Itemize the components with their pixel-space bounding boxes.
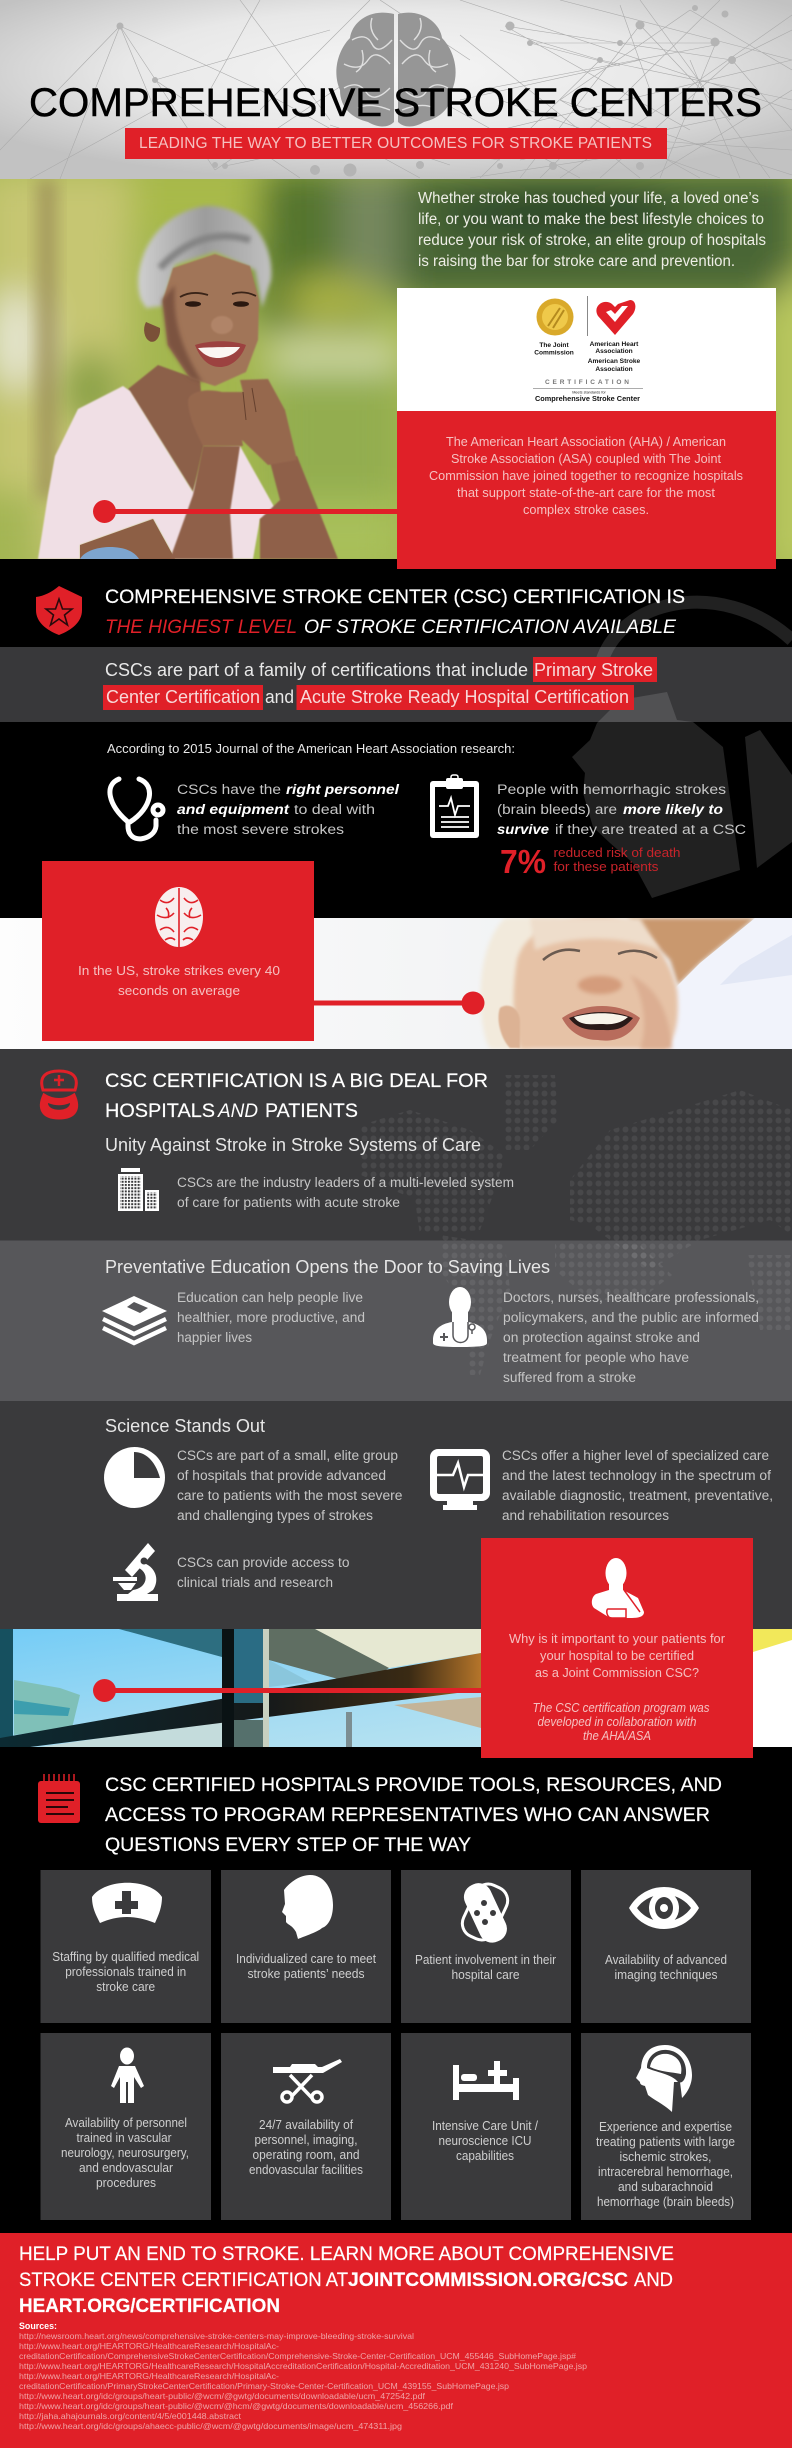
card: vascular personnel: and endovascular <box>79 2161 173 2175</box>
red callout: why it matters <box>481 1538 753 1758</box>
card: experience and expertise: Experience and expertise <box>599 2120 732 2134</box>
icon: hospital building <box>118 1168 159 1211</box>
card: patient involvement: hospital care <box>452 1968 520 1982</box>
certification logo card: Commission <box>534 350 574 356</box>
block: preventative education: on protection against stroke and <box>503 1330 700 1345</box>
network pattern <box>0 0 792 179</box>
sources list: http://www.heart.org/idc/groups/heart-public/@wcm/@gwtg/documents/downloadable/ucm_472542.pdf <box>19 2391 426 2401</box>
stat: right personnel: the most severe strokes <box>177 822 344 837</box>
photo band: laughing woman <box>0 918 792 1049</box>
heading: tools and resources <box>38 1774 722 1856</box>
pointer line <box>93 1679 481 1702</box>
certification logo card: The Joint <box>539 342 569 349</box>
card: vascular personnel <box>40 2033 211 2220</box>
stat: right personnel: to deal with <box>294 802 375 817</box>
subtitle banner: LEADING THE WAY TO BETTER OUTCOMES FOR STROKE PATIENTS <box>139 135 652 152</box>
icon: brain <box>155 887 203 947</box>
heading: highest level: THE HIGHEST LEVEL <box>105 616 297 638</box>
icon: person <box>111 2048 144 2103</box>
block: science stands out: CSCs can provide access to <box>177 1555 350 1570</box>
red stat box: every 40 seconds <box>42 861 314 1041</box>
research intro: According to 2015 Journal of the American Heart Association research: <box>107 741 515 756</box>
block: preventative education: suffered from a stroke <box>503 1370 636 1385</box>
block: preventative education: healthier, more productive, and <box>177 1310 365 1325</box>
sources list: http://www.heart.org/idc/groups/ahaecc-public/@wcm/@gwtg/documents/image/ucm_474311.jpg <box>19 2421 402 2431</box>
block: preventative education: policymakers, and the public are informed <box>503 1310 759 1325</box>
card: individualized care: Individualized care to meet <box>236 1952 376 1966</box>
heading: tools and resources: CSC CERTIFIED HOSPITALS PROVIDE TOOLS, RESOURCES, AND <box>105 1774 722 1796</box>
red partnership panel: Commission have joined together to recognize hospitals <box>429 468 743 483</box>
sources list: http://newsroom.heart.org/news/comprehensive-stroke-centers-may-improve-bleeding-stroke-survival <box>19 2331 414 2341</box>
icon: microscope <box>113 1543 158 1601</box>
stat: right personnel: CSCs have the <box>177 782 281 797</box>
red callout: why it matters: The CSC certification program was <box>532 1700 710 1715</box>
footer call to action: JOINTCOMMISSION.ORG/CSC <box>348 2269 628 2291</box>
stat: right personnel: and equipment <box>177 802 290 817</box>
certification logo card <box>397 288 776 411</box>
card: 24/7 availability: endovascular facilities <box>249 2163 363 2177</box>
black section background <box>0 559 792 919</box>
footer call to action: HEART.ORG/CERTIFICATION <box>19 2295 280 2317</box>
icon: notepad <box>38 1774 80 1823</box>
stat: more likely to survive: if they are treated at a CSC <box>555 822 746 837</box>
card: experience and expertise: hemorrhage (brain bleeds) <box>597 2195 734 2209</box>
card: intensive care unit: Intensive Care Unit / <box>432 2119 538 2133</box>
woman figure <box>38 206 338 559</box>
icon: brain <box>336 13 456 127</box>
gray band behind family of certifications <box>0 647 792 722</box>
hero photo: smiling woman outdoors <box>0 170 792 570</box>
card: patient involvement <box>401 1870 571 2023</box>
sources list: Sources: <box>19 2321 57 2331</box>
family of certifications text: Center Certification <box>106 687 260 707</box>
block: preventative education <box>102 1257 759 1385</box>
icon: joint commission gold seal <box>536 298 574 336</box>
red callout: why it matters: developed in collaboration with <box>538 1714 696 1729</box>
stat: more likely to survive: for these patients <box>554 860 658 874</box>
card: staffing: stroke care <box>96 1980 155 1994</box>
icon: nurse <box>41 1071 77 1118</box>
header panel <box>0 0 792 179</box>
card: individualized care: stroke patients’ needs <box>248 1967 364 1981</box>
stat: more likely to survive: more likely to <box>623 802 723 817</box>
heading: highest level: COMPREHENSIVE STROKE CENTER (CSC) CERTIFICATION IS <box>105 586 685 608</box>
heading: highest level <box>36 586 685 638</box>
footer call to action: STROKE CENTER CERTIFICATION AT <box>19 2269 348 2291</box>
heading: tools and resources: ACCESS TO PROGRAM REPRESENTATIVES WHO CAN ANSWER <box>105 1804 710 1826</box>
icon: stack of books <box>102 1296 167 1343</box>
heading: big deal: AND <box>217 1100 258 1122</box>
family of certifications text: and <box>265 687 294 707</box>
title: COMPREHENSIVE STROKE CENTERS <box>29 81 762 125</box>
icon: hospital bed <box>453 2061 519 2100</box>
card: vascular personnel: trained in vascular <box>76 2131 172 2145</box>
sources list: http://www.heart.org/HEARTORG/HealthcareResearch/HospitalAc- <box>19 2341 279 2351</box>
family of certifications text: Acute Stroke Ready Hospital Certification <box>300 687 629 707</box>
card: staffing: Staffing by qualified medical <box>52 1950 199 1964</box>
card: advanced imaging: Availability of advanced <box>605 1953 727 1967</box>
icon: eye <box>629 1887 699 1929</box>
sources list: http://www.heart.org/HEARTORG/HealthcareResearch/HospitalAccreditationCertification/Hospital-Accreditation_UCM_431240_SubHomePage.jsp <box>19 2361 587 2371</box>
icon: head with brain <box>636 2045 692 2112</box>
block: science stands out: CSCs offer a higher level of specialized care <box>502 1448 769 1463</box>
card: intensive care unit <box>401 2033 571 2220</box>
certification logo card: Meets standards for <box>572 390 607 394</box>
sources list: http://www.heart.org/idc/groups/heart-public/@wcm/@hcm/@gwtg/documents/downloadable/ucm_456266.pdf <box>19 2401 454 2411</box>
red callout: why it matters: as a Joint Commission CSC? <box>535 1665 699 1680</box>
block: preventative education: Education can help people live <box>177 1290 363 1305</box>
family of certifications text: CSCs are part of a family of certifications that include <box>105 660 528 680</box>
heading: big deal: PATIENTS <box>265 1100 358 1122</box>
icon: monitor <box>430 1449 490 1510</box>
red partnership panel: Stroke Association (ASA) coupled with The Joint <box>451 451 721 466</box>
stat: more likely to survive: survive <box>497 822 550 837</box>
red callout: why it matters: your hospital to be certified <box>540 1648 694 1663</box>
intro paragraph: is raising the bar for stroke care and prevention. <box>418 253 735 270</box>
card: individualized care <box>221 1870 391 2023</box>
photo band: hospital windows <box>0 1629 792 1748</box>
card: 24/7 availability <box>221 2033 391 2220</box>
sources list <box>19 2321 587 2431</box>
block: science stands out: of hospitals that provide advanced <box>177 1468 386 1483</box>
icon: stethoscope <box>110 779 163 839</box>
card: 24/7 availability: 24/7 availability of <box>259 2118 353 2132</box>
red callout: why it matters: Why is it important to your patients for <box>509 1631 726 1646</box>
heading: highest level: OF STROKE CERTIFICATION AVAILABLE <box>304 616 677 638</box>
pointer line <box>314 992 484 1014</box>
stat: more likely to survive: People with hemorrhagic strokes <box>497 782 726 797</box>
block: science stands out: care to patients with the most severe <box>177 1488 402 1503</box>
card: 24/7 availability: operating room, and <box>252 2148 360 2162</box>
pointer line <box>93 500 397 523</box>
red partnership panel: that support state-of-the-art care for the most <box>457 485 715 500</box>
card: vascular personnel: procedures <box>96 2176 156 2190</box>
icon: doctor <box>433 1287 487 1347</box>
icon: heart check <box>596 300 635 335</box>
footer call to action: AND <box>634 2269 673 2291</box>
certification logo card: Association <box>595 366 633 373</box>
heading: big deal: CSC CERTIFICATION IS A BIG DEAL FOR <box>105 1070 488 1092</box>
intro paragraph: Whether stroke has touched your life, a loved one’s <box>418 190 759 207</box>
block: science stands out: and rehabilitation resources <box>502 1508 669 1523</box>
heading: big deal: HOSPITALS <box>105 1100 215 1122</box>
sources list: http://www.heart.org/HEARTORG/HealthcareResearch/HospitalAc- <box>19 2371 279 2381</box>
red stat box: every 40 seconds: In the US, stroke strikes every 40 <box>78 963 280 978</box>
card: vascular personnel: Availability of personnel <box>65 2116 187 2130</box>
block: preventative education: happier lives <box>177 1330 252 1345</box>
stat: more likely to survive: 7% <box>500 843 546 880</box>
icon: bandage <box>458 1879 512 1947</box>
stat: more likely to survive: (brain bleeds) are <box>497 802 617 817</box>
black resources section background <box>0 1747 792 2233</box>
block: science stands out: and the latest technology in the spectrum of <box>502 1468 771 1483</box>
family of certifications text <box>103 657 657 710</box>
sources list: http://jaha.ahajournals.org/content/4/5/e001448.abstract <box>19 2411 242 2421</box>
intro paragraph <box>418 190 766 270</box>
red callout: why it matters: the AHA/ASA <box>583 1728 651 1743</box>
heading: big deal <box>41 1070 488 1122</box>
block: science stands out: clinical trials and research <box>177 1575 333 1590</box>
card: vascular personnel: neurology, neurosurgery, <box>61 2146 189 2160</box>
big deal panel background <box>0 1049 792 1629</box>
card: advanced imaging: imaging techniques <box>614 1968 718 1982</box>
sources list: creditationCertification/ComprehensiveStrokeCenterCertification/Comprehensive-Stroke-Center-Certification_UCM_455446_SubHomePage.jsp# <box>19 2351 576 2361</box>
card: intensive care unit: capabilities <box>456 2149 514 2163</box>
icon: head profile <box>282 1875 333 1939</box>
red partnership panel <box>397 411 776 569</box>
footer call to action: HELP PUT AN END TO STROKE. LEARN MORE ABOUT COMPREHENSIVE <box>19 2243 674 2265</box>
dotted world map <box>361 1075 792 1375</box>
intro paragraph: life, or you want to make the best lifestyle choices to <box>418 211 764 228</box>
icon: shield with star <box>36 586 82 635</box>
icon: patient with arm sling <box>592 1558 644 1618</box>
subtitle banner <box>125 128 667 159</box>
heading: tools and resources: QUESTIONS EVERY STEP OF THE WAY <box>105 1834 471 1856</box>
card: experience and expertise: and subarachnoid <box>618 2180 713 2194</box>
head silhouette backdrop <box>572 602 792 898</box>
block: science stands out <box>104 1416 773 1601</box>
stat: right personnel: right personnel <box>286 782 399 797</box>
sources list: creditationCertification/PrimaryStrokeCenterCertification/Primary-Stroke-Center-Certification_UCM_439155_SubHomePage.jsp <box>19 2381 509 2391</box>
block: science stands out: available diagnostic, treatment, preventative, <box>502 1488 773 1503</box>
intro paragraph: reduce your risk of stroke, an elite group of hospitals <box>418 232 766 249</box>
block: science stands out: Science Stands Out <box>105 1416 265 1436</box>
block: preventative education: Preventative Education Opens the Door to Saving Lives <box>105 1257 550 1277</box>
red stat box: every 40 seconds: seconds on average <box>118 983 240 998</box>
certification logo card: Association <box>595 348 633 355</box>
stat: more likely to survive: reduced risk of death <box>554 846 681 860</box>
card: intensive care unit: neuroscience ICU <box>438 2134 532 2148</box>
block: preventative education: treatment for people who have <box>503 1350 689 1365</box>
block: preventative education: Doctors, nurses, healthcare professionals, <box>503 1290 759 1305</box>
card: experience and expertise <box>581 2033 751 2220</box>
icon: clipboard <box>430 775 479 838</box>
icon: nurse cap <box>92 1883 162 1923</box>
certification logo card: Comprehensive Stroke Center <box>535 394 640 403</box>
block: unity against stroke: of care for patients with acute stroke <box>177 1195 400 1210</box>
card: patient involvement: Patient involvement in their <box>415 1953 556 1967</box>
card: experience and expertise: intracerebral hemorrhage, <box>598 2165 733 2179</box>
certification logo card: American Stroke <box>588 358 641 365</box>
stat: more likely to survive <box>430 775 746 880</box>
certification logo card: American Heart <box>590 341 639 348</box>
card: experience and expertise: treating patients with large <box>596 2135 735 2149</box>
block: unity against stroke <box>105 1135 514 1211</box>
footer call to action <box>0 2233 792 2448</box>
family of certifications text: Primary Stroke <box>534 660 653 680</box>
card: advanced imaging <box>581 1870 751 2023</box>
red partnership panel: complex stroke cases. <box>523 502 649 517</box>
card: staffing: professionals trained in <box>65 1965 186 1979</box>
block: science stands out: and challenging types of strokes <box>177 1508 373 1523</box>
block: unity against stroke: Unity Against Stroke in Stroke Systems of Care <box>105 1135 481 1155</box>
certification logo card: CERTIFICATION <box>545 379 629 386</box>
card: experience and expertise: ischemic strokes, <box>620 2150 712 2164</box>
block: unity against stroke: CSCs are the industry leaders of a multi-leveled system <box>177 1175 514 1190</box>
block: science stands out: CSCs are part of a small, elite group <box>177 1448 398 1463</box>
card: 24/7 availability: personnel, imaging, <box>254 2133 358 2147</box>
icon: pie chart <box>104 1447 165 1508</box>
card: staffing <box>40 1870 211 2023</box>
red partnership panel: The American Heart Association (AHA) / American <box>446 434 726 449</box>
icon: stretcher <box>273 2059 342 2102</box>
stat: right personnel <box>110 779 399 839</box>
